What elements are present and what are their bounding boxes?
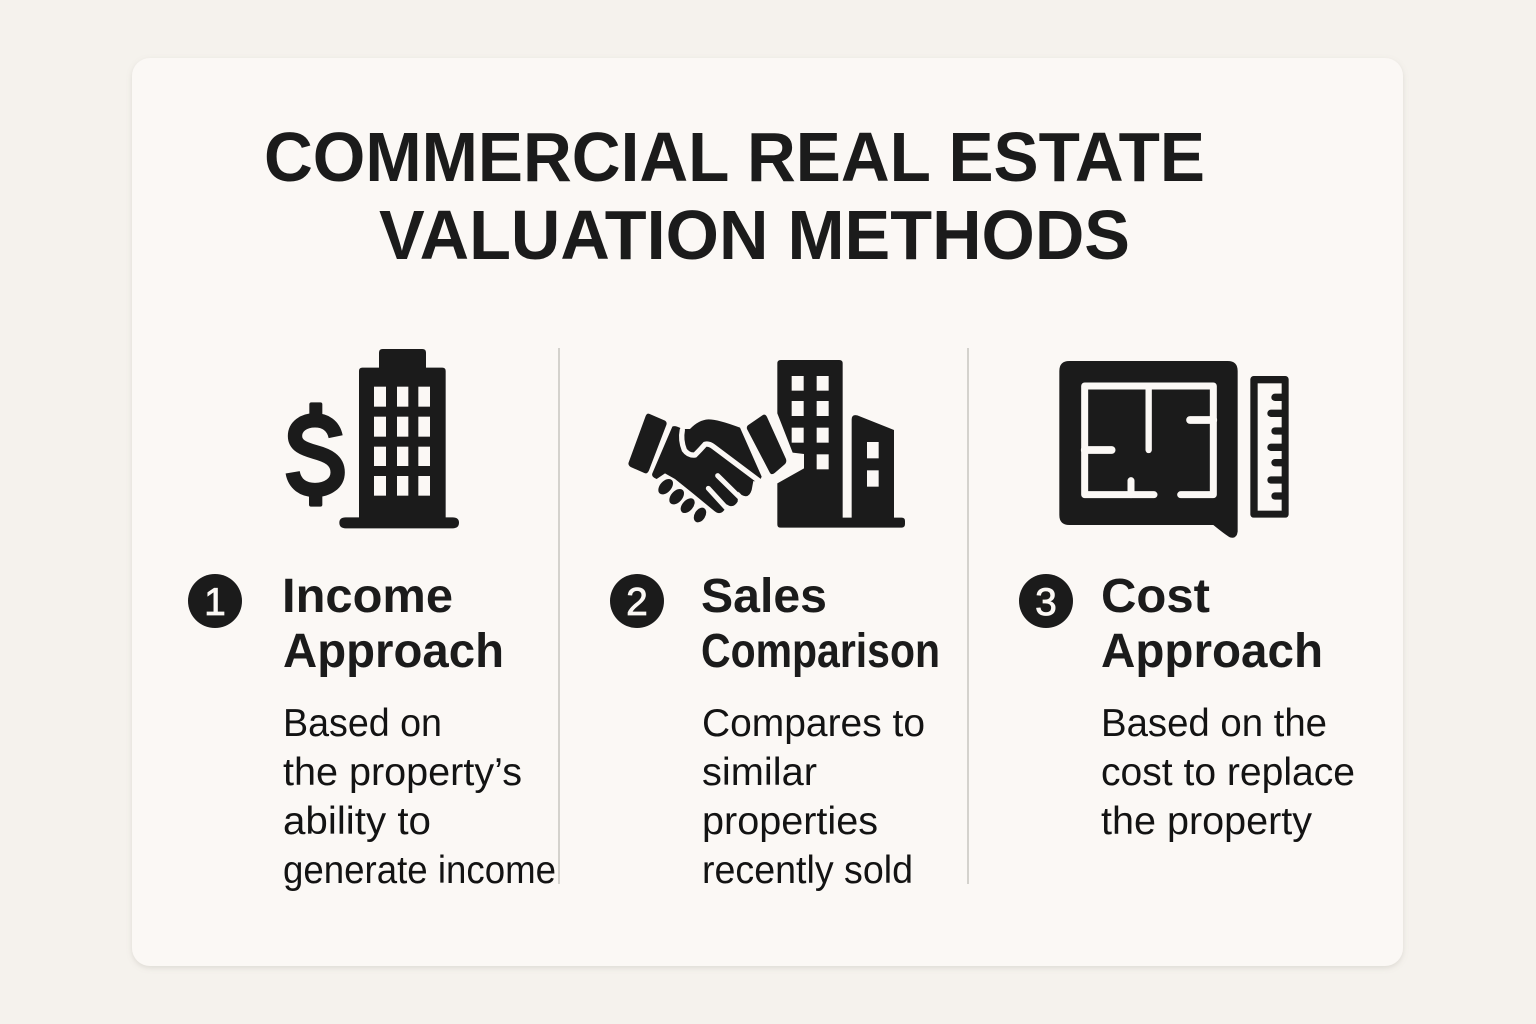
icon part: handshake	[628, 414, 786, 525]
number badge 1: 1	[204, 581, 226, 624]
heading: income approach	[282, 570, 504, 678]
icon: dollar sign and office tower	[293, 349, 459, 528]
panel: sales comparison	[610, 360, 940, 892]
text: sales comparison description: similar	[702, 751, 817, 794]
heading: income approach: Approach	[283, 625, 504, 678]
panel: income approach	[188, 349, 556, 892]
number badge 2	[610, 574, 664, 628]
heading: sales comparison: Comparison	[701, 625, 940, 678]
heading: sales comparison: Sales	[701, 570, 827, 623]
number badge 1	[188, 574, 242, 628]
text: income approach description: the property’s	[283, 751, 522, 794]
text: cost approach description	[1101, 702, 1355, 843]
icon part: floor plan	[1059, 361, 1238, 538]
text: sales comparison description	[702, 702, 925, 892]
icon part: ruler	[1250, 376, 1289, 518]
panel: cost approach	[1019, 361, 1355, 843]
text: sales comparison description: properties	[702, 800, 878, 843]
text: cost approach description: Based on the	[1101, 702, 1327, 745]
number badge 2: 2	[626, 581, 648, 624]
text: income approach description: Based on	[283, 702, 442, 745]
text: income approach description: generate income	[283, 849, 556, 892]
title: COMMERCIAL REAL ESTATE	[264, 118, 1205, 196]
heading: sales comparison	[701, 570, 940, 678]
text: sales comparison description: Compares to	[702, 702, 925, 745]
title	[264, 118, 1205, 274]
icon: handshake and buildings	[628, 360, 905, 528]
heading: income approach: Income	[282, 570, 453, 623]
text: sales comparison description: recently sold	[702, 849, 913, 892]
text: cost approach description: the property	[1101, 800, 1313, 843]
title: VALUATION METHODS	[379, 196, 1130, 274]
text: cost approach description: cost to replace	[1101, 751, 1355, 794]
panel: main card	[132, 58, 1403, 966]
number badge 3: 3	[1035, 581, 1057, 624]
heading: cost approach: Cost	[1101, 570, 1210, 623]
text: income approach description: ability to	[283, 800, 431, 843]
icon: floor plan and ruler	[1059, 361, 1289, 538]
icon part: buildings	[777, 360, 905, 528]
text: income approach description	[283, 702, 556, 892]
heading: cost approach: Approach	[1101, 625, 1323, 678]
heading: cost approach	[1101, 570, 1323, 678]
number badge 3	[1019, 574, 1073, 628]
